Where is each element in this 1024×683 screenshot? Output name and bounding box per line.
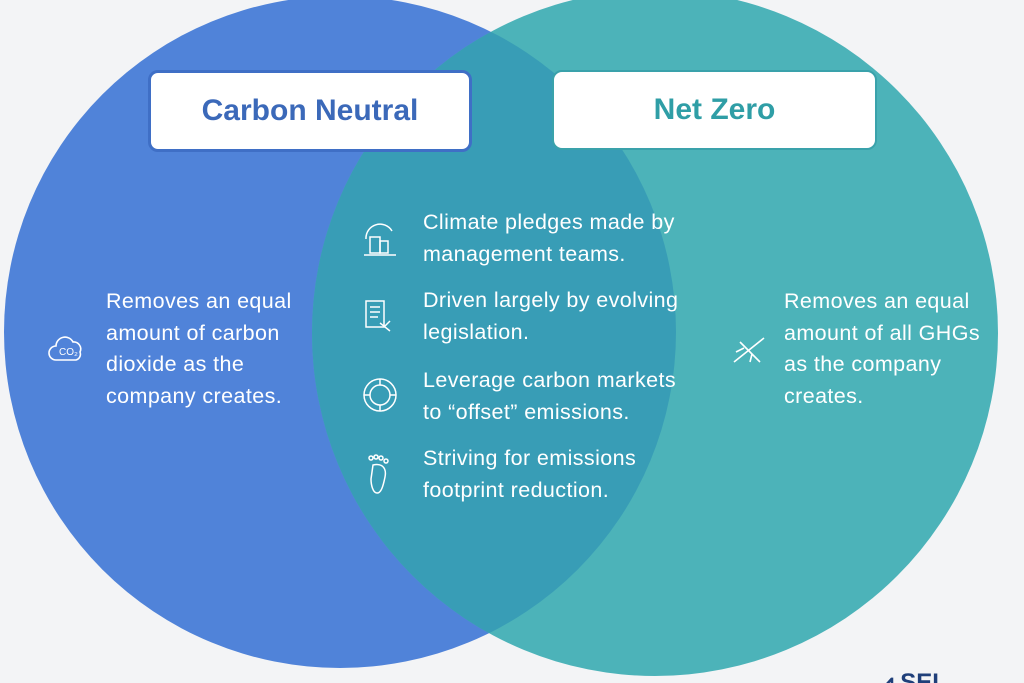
icon: buildings bbox=[364, 223, 396, 256]
heading: Net Zero: Net Zero bbox=[654, 93, 775, 126]
circle: net zero bbox=[312, 0, 998, 676]
icon: footprint bbox=[368, 454, 389, 494]
text: carbon neutral: company creates. bbox=[106, 384, 282, 408]
text: footprint: Striving for emissions bbox=[423, 446, 636, 470]
text: carbon neutral bbox=[106, 289, 292, 408]
text: pledges bbox=[423, 210, 675, 266]
text: carbon neutral: amount of carbon bbox=[106, 320, 280, 344]
text: pledges: Climate pledges made by bbox=[423, 210, 675, 234]
text: legislation: legislation. bbox=[423, 320, 529, 344]
text: net zero: Removes an equal bbox=[784, 289, 970, 313]
heading: Net Zero bbox=[552, 70, 877, 150]
icon: document bbox=[365, 300, 390, 332]
text: carbon markets: Leverage carbon markets bbox=[423, 368, 676, 392]
heading: Carbon Neutral bbox=[148, 70, 472, 152]
heading: Carbon Neutral: Carbon Neutral bbox=[202, 94, 418, 127]
icon: globe bbox=[363, 378, 397, 412]
text: footprint: footprint reduction. bbox=[423, 478, 609, 502]
text: carbon markets: to “offset” emissions. bbox=[423, 400, 630, 424]
text: legislation: Driven largely by evolving bbox=[423, 288, 678, 312]
icon: co2 cloud bbox=[48, 336, 82, 361]
icon: co2 cloud: CO₂ bbox=[59, 347, 78, 358]
text: carbon neutral: Removes an equal bbox=[106, 289, 292, 313]
text: net zero: as the company bbox=[784, 352, 941, 376]
text: net zero: creates. bbox=[784, 384, 864, 408]
text: carbon neutral: dioxide as the bbox=[106, 352, 244, 376]
text: carbon markets bbox=[423, 368, 676, 424]
text: footprint bbox=[423, 446, 636, 502]
overlap bbox=[312, 32, 676, 633]
text: net zero: amount of all GHGs bbox=[784, 320, 980, 344]
text: legislation bbox=[423, 288, 678, 344]
text: pledges: management teams. bbox=[423, 242, 626, 266]
text: net zero bbox=[784, 289, 980, 408]
circle: carbon neutral bbox=[4, 0, 676, 668]
icon: plane bbox=[734, 338, 764, 363]
center list bbox=[363, 210, 678, 502]
